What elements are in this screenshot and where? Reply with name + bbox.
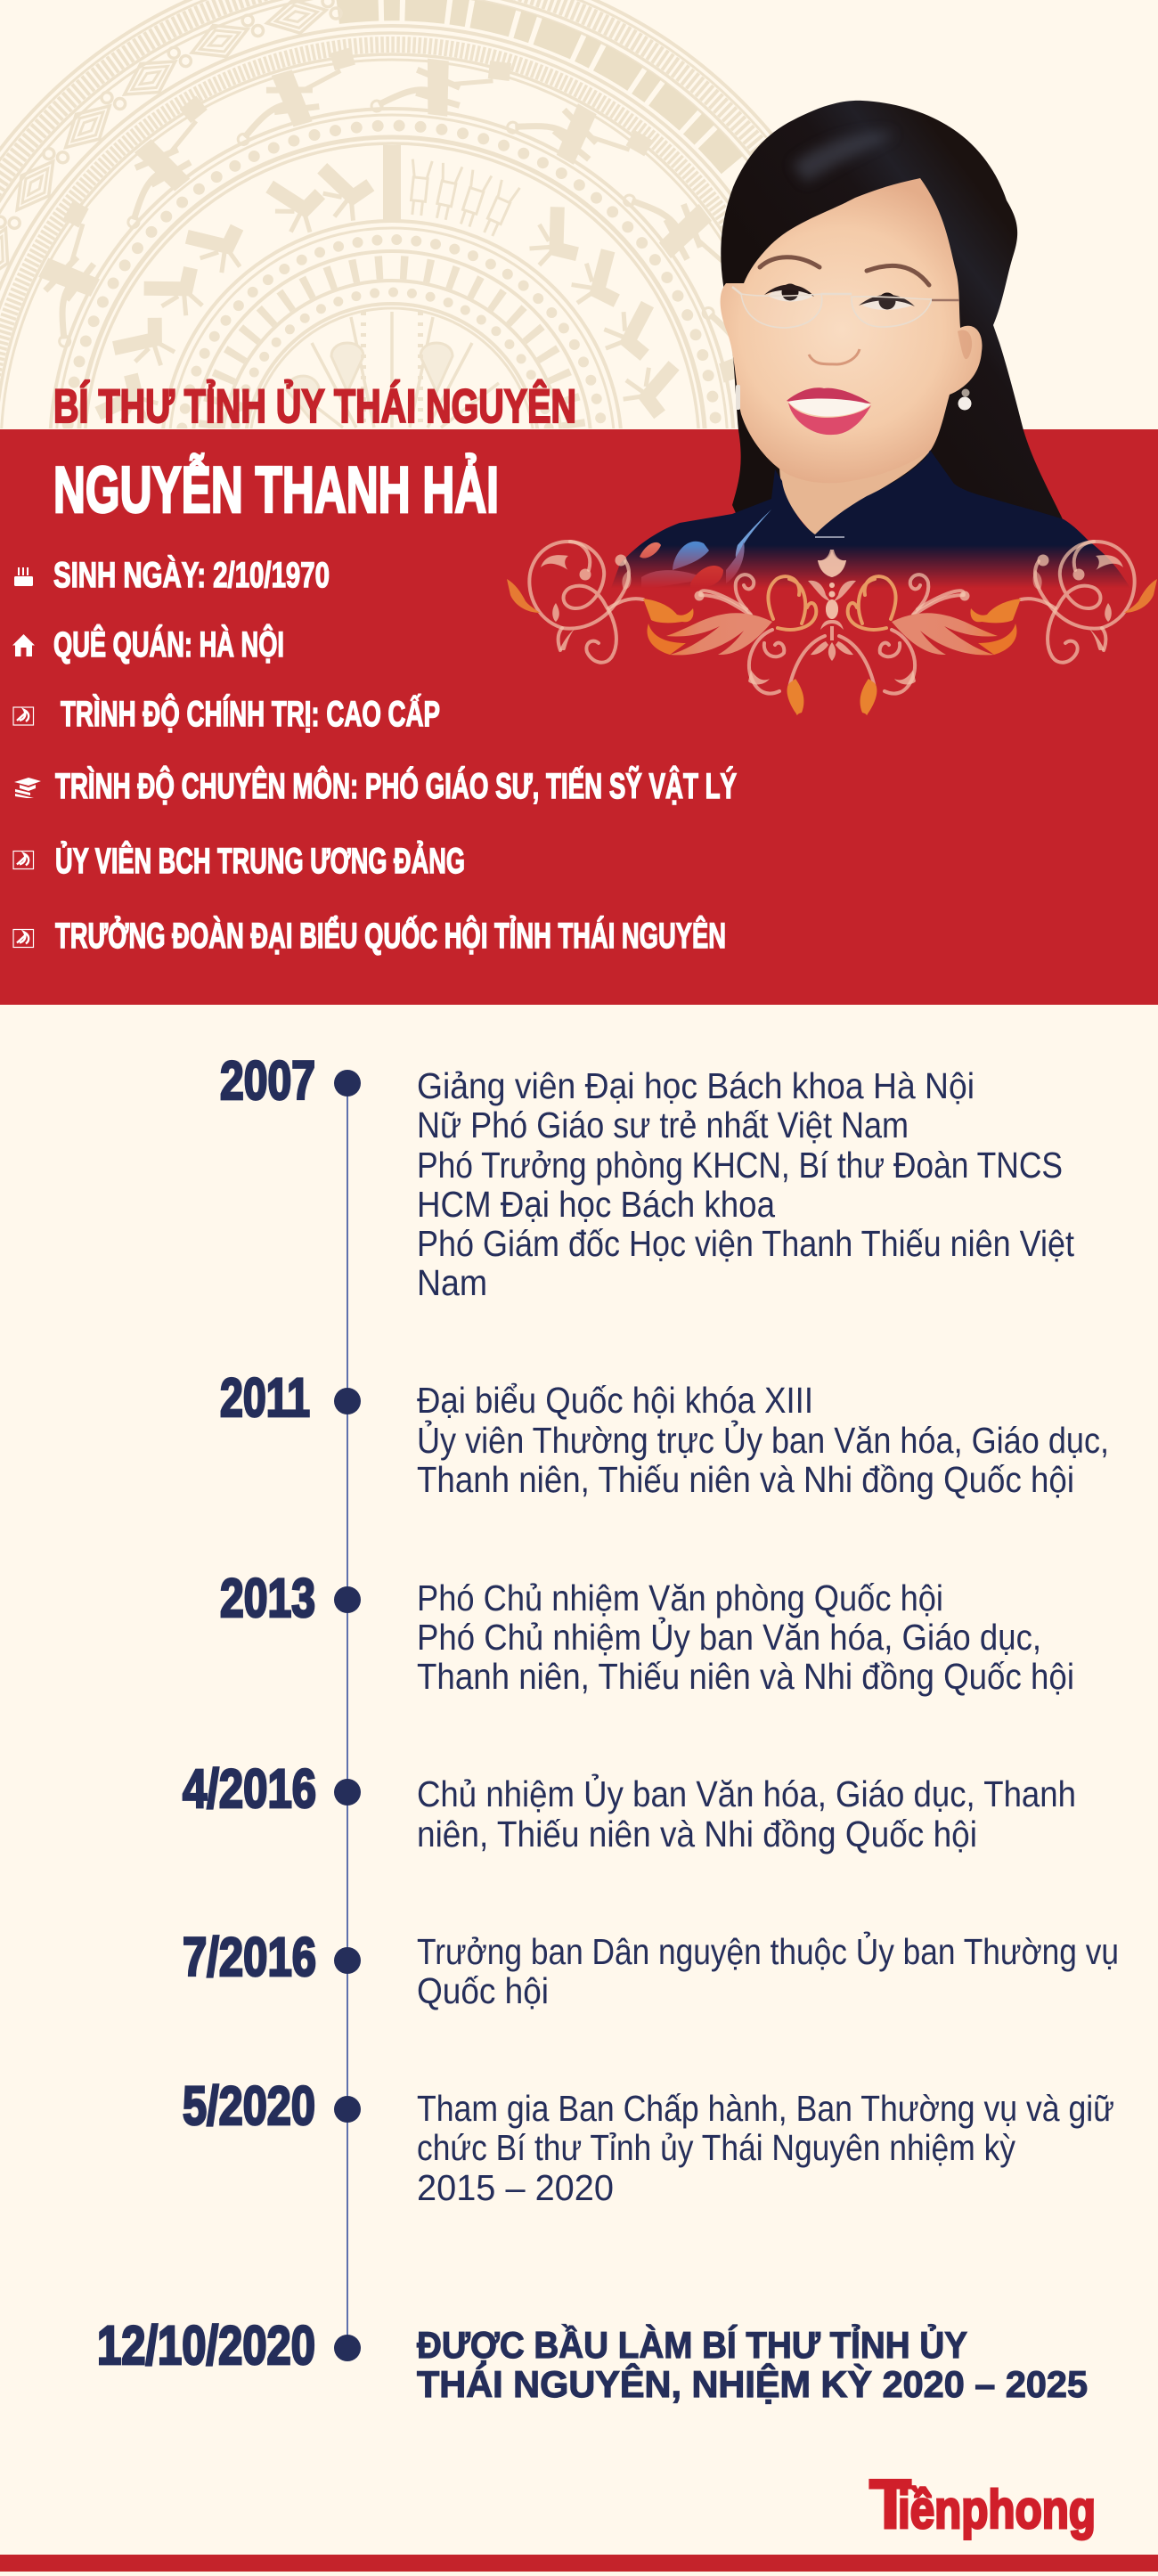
delegation head: TRƯỞNG ĐOÀN ĐẠI BIỂU QUỐC HỘI TỈNH THÁI NGUYÊN [55, 914, 726, 956]
entry 12/10/2020: 12/10/2020 [97, 2315, 315, 2376]
entry 2013 [220, 1568, 1074, 1697]
logo: iềnphong [898, 2480, 1096, 2539]
entry 12/10/2020: THÁI NGUYÊN, NHIỆM KỲ 2020 – 2025 [417, 2362, 1088, 2405]
entry 2007 [220, 1050, 1075, 1303]
mouth [787, 387, 871, 435]
political level: TRÌNH ĐỘ CHÍNH TRỊ: CAO CẤP [61, 693, 440, 734]
entry 2011: 2011 [220, 1367, 310, 1428]
entry 12/10/2020: ĐƯỢC BẦU LÀM BÍ THƯ TỈNH ỦY [417, 2323, 967, 2366]
entry 5/2020: chức Bí thư Tỉnh ủy Thái Nguyên nhiệm kỳ [417, 2127, 1015, 2168]
birth date: SINH NGÀY: 2/10/1970 [53, 555, 330, 595]
icon: cake [14, 567, 33, 586]
ornament [507, 542, 1157, 715]
icon: party flag [13, 707, 34, 725]
entry 2011: Đại biểu Quốc hội khóa XIII [417, 1380, 813, 1421]
entry 4/2016: 4/2016 [183, 1758, 316, 1819]
name title: NGUYỄN THANH HẢI [53, 454, 499, 526]
logo: T [869, 2465, 911, 2543]
entry 7/2016: 7/2016 [183, 1927, 316, 1987]
icon: graduation books [14, 778, 41, 798]
entry 2013: Phó Chủ nhiệm Ủy ban Văn hóa, Giáo dục, [417, 1617, 1041, 1658]
eyebrows [760, 257, 929, 285]
icon: party flag [13, 930, 34, 948]
profile list [12, 555, 737, 956]
red panel [0, 429, 1158, 1005]
entry 2007: 2007 [220, 1050, 315, 1111]
entry 2011 [220, 1367, 1109, 1500]
nose [809, 349, 860, 364]
hometown: QUÊ QUÁN: HÀ NỘI [53, 624, 284, 664]
entry 2007: Phó Giám đốc Học viện Thanh Thiếu niên Việt [417, 1223, 1075, 1264]
entry 2011: Thanh niên, Thiếu niên và Nhi đồng Quốc hội [417, 1459, 1074, 1500]
entry 12/10/2020 [97, 2315, 1088, 2405]
bronze drum pattern [0, 0, 773, 428]
entry 2007: Nam [417, 1262, 487, 1303]
entry 4/2016 [183, 1758, 1076, 1855]
footer bar [0, 2555, 1158, 2572]
timeline [97, 1050, 1119, 2405]
entry 2007: Phó Trưởng phòng KHCN, Bí thư Đoàn TNCS [417, 1145, 1063, 1186]
timeline axis [347, 1083, 348, 2348]
eyes [764, 283, 915, 310]
central committee: ỦY VIÊN BCH TRUNG ƯƠNG ĐẢNG [55, 840, 465, 881]
entry 2013: 2013 [220, 1568, 315, 1628]
entry 5/2020: 2015 – 2020 [417, 2167, 614, 2208]
earrings [736, 385, 971, 410]
subtitle: BÍ THƯ TỈNH ỦY THÁI NGUYÊN [53, 379, 576, 433]
entry 2013: Phó Chủ nhiệm Văn phòng Quốc hội [417, 1577, 943, 1618]
entry 2013: Thanh niên, Thiếu niên và Nhi đồng Quốc hội [417, 1656, 1074, 1697]
entry 4/2016: Chủ nhiệm Ủy ban Văn hóa, Giáo dục, Thanh [417, 1773, 1076, 1814]
entry 5/2020 [183, 2075, 1114, 2208]
glasses [732, 287, 959, 328]
icon: party flag [13, 852, 34, 869]
entry 2007: HCM Đại học Bách khoa [417, 1184, 775, 1225]
entry 2007: Nữ Phó Giáo sư trẻ nhất Việt Nam [417, 1105, 909, 1145]
entry 4/2016: niên, Thiếu niên và Nhi đồng Quốc hội [417, 1814, 977, 1855]
logo [869, 2465, 1096, 2543]
portrait [611, 101, 1130, 590]
entry 2007: Giảng viên Đại học Bách khoa Hà Nội [417, 1065, 975, 1106]
professional level: TRÌNH ĐỘ CHUYÊN MÔN: PHÓ GIÁO SƯ, TIẾN SỸ VẬT LÝ [55, 765, 737, 806]
icon: house [12, 634, 35, 656]
entry 5/2020: 5/2020 [183, 2075, 315, 2136]
entry 7/2016 [183, 1927, 1119, 2011]
entry 7/2016: Quốc hội [417, 1970, 549, 2011]
